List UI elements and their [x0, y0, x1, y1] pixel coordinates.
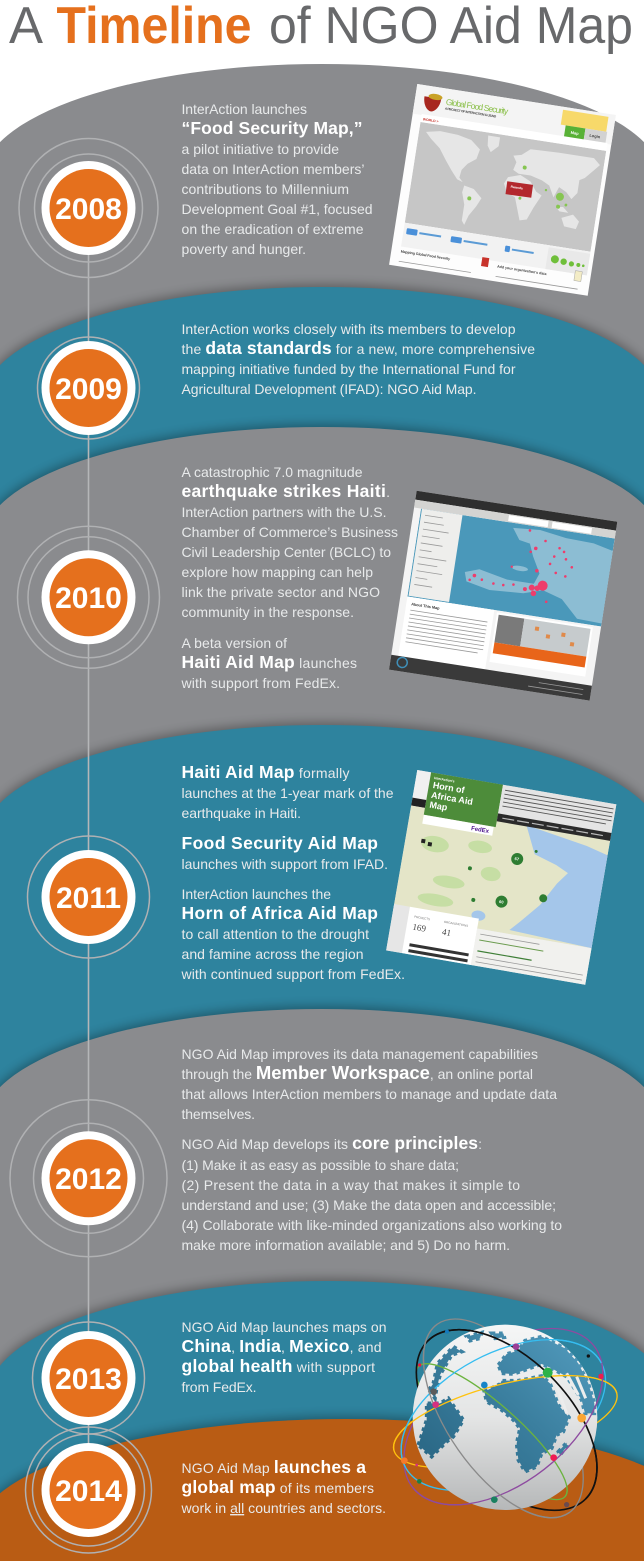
timeline vertical line: [88, 240, 90, 1450]
text block: 2013: China, India, Mexico, and: [182, 1336, 382, 1356]
map: 60: [499, 899, 505, 905]
footer: [389, 655, 592, 701]
text block: 2011: Food Security Aid Map: [182, 833, 378, 853]
band: 2010 grey: [0, 424, 644, 1561]
green title box: Horn of: [432, 780, 466, 795]
text block: 2008: poverty and hunger.: [182, 241, 306, 257]
text block: 2011: and famine across the region: [182, 946, 364, 962]
year marker: 2009: [38, 337, 140, 439]
stats panel: PROJECTS: [414, 915, 430, 921]
stats panel: ORGANIZATIONS: [444, 920, 468, 928]
text block: 2011: Haiti Aid Map formally: [182, 762, 350, 782]
screenshot: Horn of Africa Aid Map: [386, 770, 617, 985]
screenshot: Global Food Security map: [389, 84, 616, 296]
text block: 2011: InterAction launches the: [182, 886, 331, 902]
text block: 2008: InterAction launches: [182, 101, 307, 117]
year marker: 2013: 2013: [55, 1363, 122, 1396]
text block: 2012: make more information available; and 5) Do no harm.: [182, 1237, 510, 1253]
year marker: 2010: [18, 526, 160, 668]
buttons: [564, 125, 585, 139]
year marker: 2011: 2011: [56, 882, 121, 915]
green title box: Africa Aid: [430, 790, 474, 807]
title: [9, 0, 633, 54]
screenshot: Global Food Security map: Add your organization's data: [497, 265, 548, 276]
text block: 2008: on the eradication of extreme: [182, 221, 364, 237]
text block: 2008: data on InterAction members’: [182, 161, 364, 177]
screenshot: Global Food Security map: WORLD >: [423, 117, 439, 124]
band: 2012 grey: [0, 1006, 644, 1561]
text block: 2012: that allows InterAction members to manage and update data: [182, 1086, 557, 1102]
text block: 2011: with continued support from FedEx.: [180, 966, 405, 982]
text block: 2012: understand and use; (3) Make the data open and accessible;: [182, 1197, 556, 1213]
year marker: 2014: 2014: [55, 1475, 122, 1508]
band: 2013 teal: [0, 1278, 644, 1561]
text block: 2010: explore how mapping can help: [182, 564, 373, 580]
year marker: 2011: [28, 836, 150, 958]
screenshot: Global Food Security map: Login: [589, 133, 601, 139]
orbit rings: front: [372, 1293, 635, 1544]
text block: 2010: link the private sector and NGO: [182, 584, 380, 600]
text block: 2009: mapping initiative funded by the International Fund for: [182, 361, 516, 377]
screenshot: Global Food Security map: Global Food Security: [445, 97, 510, 116]
text block: 2012: NGO Aid Map improves its data management capabilities: [182, 1046, 538, 1062]
text block: 2012: (4) Collaborate with like-minded organizations also working to: [182, 1217, 562, 1233]
text block: 2011: [180, 762, 405, 982]
text block: 2010: [180, 464, 398, 691]
text block: 2010: Haiti Aid Map launches: [182, 652, 357, 672]
text block: 2014: NGO Aid Map launches a: [182, 1457, 366, 1477]
text block: 2008: [182, 101, 372, 257]
year marker: 2014: [26, 1427, 152, 1553]
text block: 2011: earthquake in Haiti.: [182, 805, 301, 821]
text block: 2012: through the Member Workspace, an online portal: [182, 1062, 533, 1083]
text block: 2011: to call attention to the drought: [182, 926, 369, 942]
text block: 2010: community in the response.: [182, 604, 354, 620]
globe with orbit rings: [372, 1293, 635, 1544]
year marker: 2012: 2012: [55, 1163, 122, 1196]
text block: 2012: [182, 1046, 562, 1253]
text block: 2010: earthquake strikes Haiti.: [182, 481, 390, 501]
stats panel: 41: [441, 927, 452, 938]
text block: 2010: A beta version of: [182, 635, 287, 651]
year marker: 2009: 2009: [55, 373, 122, 406]
text block: 2013: from FedEx.: [182, 1379, 256, 1395]
bottom row: [401, 223, 591, 275]
text block: 2008: “Food Security Map,”: [182, 118, 362, 138]
text block: 2012: (1) Make it as easy as possible to share data;: [182, 1157, 459, 1173]
band: 2011 teal: [0, 722, 644, 1561]
land gaps: [555, 1373, 586, 1413]
globe sphere: [413, 1325, 597, 1510]
about panel: [398, 597, 494, 669]
screenshot: Haiti Aid Map: [389, 491, 623, 702]
text block: 2014: [180, 1457, 386, 1516]
text block: 2010: Chamber of Commerce’s Business: [182, 524, 398, 540]
text block: 2012: (2) Present the data in a way that makes it simple to: [182, 1177, 520, 1193]
green title box: [422, 772, 503, 836]
text block: 2011: launches at the 1-year mark of the: [182, 785, 394, 801]
orbit rings: back: [372, 1293, 635, 1544]
text block: 2009: the data standards for a new, more comprehensive: [182, 338, 535, 358]
year marker: 2012: [10, 1100, 167, 1257]
icon: red bowl logo: [422, 92, 443, 113]
text block: 2013: [182, 1319, 386, 1395]
text block: 2008: a pilot initiative to provide: [182, 141, 339, 157]
text block: 2009: Agricultural Development (IFAD): NGO Aid Map.: [182, 381, 476, 397]
text panel: [471, 929, 592, 985]
screenshot: Global Food Security map: Mapping Global Food Security: [400, 249, 450, 261]
map: [392, 805, 611, 948]
text block: 2012: NGO Aid Map develops its core principles:: [182, 1133, 482, 1153]
green title box: FedEx: [471, 826, 490, 835]
text block: 2010: A catastrophic 7.0 magnitude: [182, 464, 363, 480]
screenshot: Global Food Security map: A PROJECT OF INTERACTION & USAID: [445, 107, 497, 119]
thumbnail: [489, 612, 593, 677]
year marker: 2010: 2010: [55, 582, 122, 615]
screenshot: Global Food Security map: Map: [570, 130, 580, 136]
text block: 2009: InterAction works closely with its members to develop: [182, 321, 516, 337]
text block: 2010: Civil Leadership Center (BCLC) to: [182, 544, 391, 560]
text block: 2013: NGO Aid Map launches maps on: [182, 1319, 386, 1335]
year marker: 2008: [19, 138, 158, 278]
orbit nodes: [401, 1330, 604, 1507]
world map: [405, 122, 606, 252]
map: 67: [514, 856, 520, 862]
text block: 2013: global health with support: [182, 1356, 375, 1376]
text block: 2011: launches with support from IFAD.: [182, 856, 388, 872]
text block: 2009: [182, 321, 535, 397]
world map: Rwanda: [510, 185, 523, 191]
text block: 2010: with support from FedEx.: [180, 675, 340, 691]
stats panel: [386, 904, 479, 965]
text block: 2012: themselves.: [182, 1106, 255, 1122]
green title box: InterAction's: [434, 776, 455, 783]
text block: 2014: work in all countries and sectors.: [180, 1500, 386, 1516]
text block: 2014: global map of its members: [182, 1477, 374, 1497]
continents: [418, 1333, 594, 1472]
text block: 2010: InterAction partners with the U.S.: [182, 504, 386, 520]
text block: 2011: Horn of Africa Aid Map: [182, 903, 378, 923]
band: 2014 orange: [0, 1416, 644, 1561]
haiti map: [407, 509, 621, 627]
year marker: 2013: [32, 1322, 144, 1434]
text block: 2008: Development Goal #1, focused: [182, 201, 372, 217]
text block: 2008: contributions to Millennium: [182, 181, 349, 197]
note: [561, 110, 609, 132]
green title box: Map: [429, 800, 449, 813]
screenshot: Haiti Aid Map: About This Map: [411, 602, 440, 611]
stats panel: 169: [412, 922, 427, 934]
year marker: 2008: 2008: [55, 193, 122, 226]
